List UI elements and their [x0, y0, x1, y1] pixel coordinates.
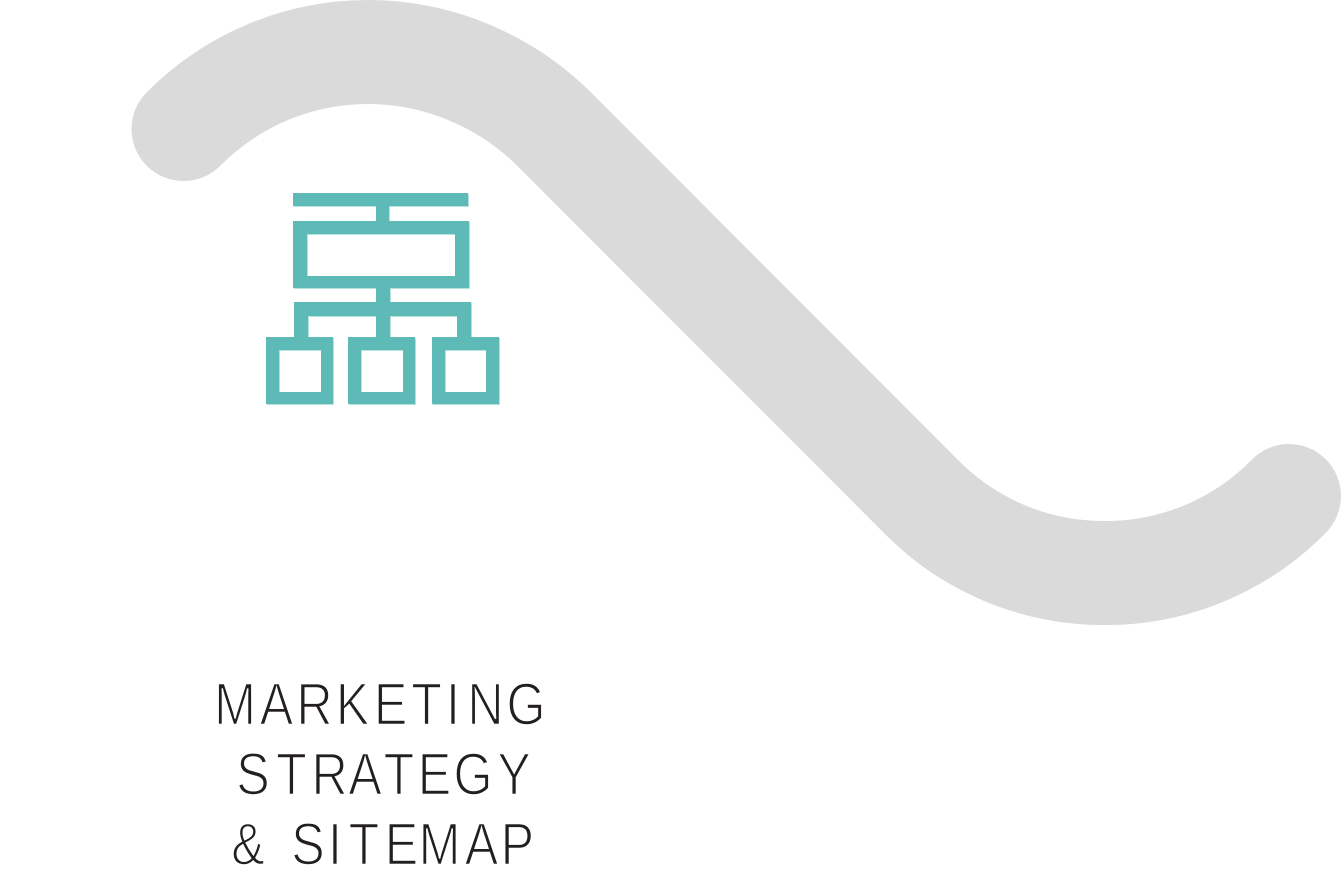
title line 1: MARKETING — [214, 671, 546, 737]
icon: sitemap hierarchy — [266, 193, 499, 404]
icon part: right box — [432, 337, 499, 404]
icon part: left box — [266, 337, 333, 404]
title line 2: STRATEGY — [236, 741, 531, 807]
icon part: main rectangle — [293, 221, 469, 288]
icon part: middle box — [348, 337, 415, 404]
title — [214, 671, 546, 877]
icon part: branching connectors — [294, 288, 471, 337]
icon part: top bar and connector — [293, 193, 468, 221]
grey curved wave band — [184, 52, 1289, 573]
title line 3: & SITEMAP — [231, 811, 534, 877]
